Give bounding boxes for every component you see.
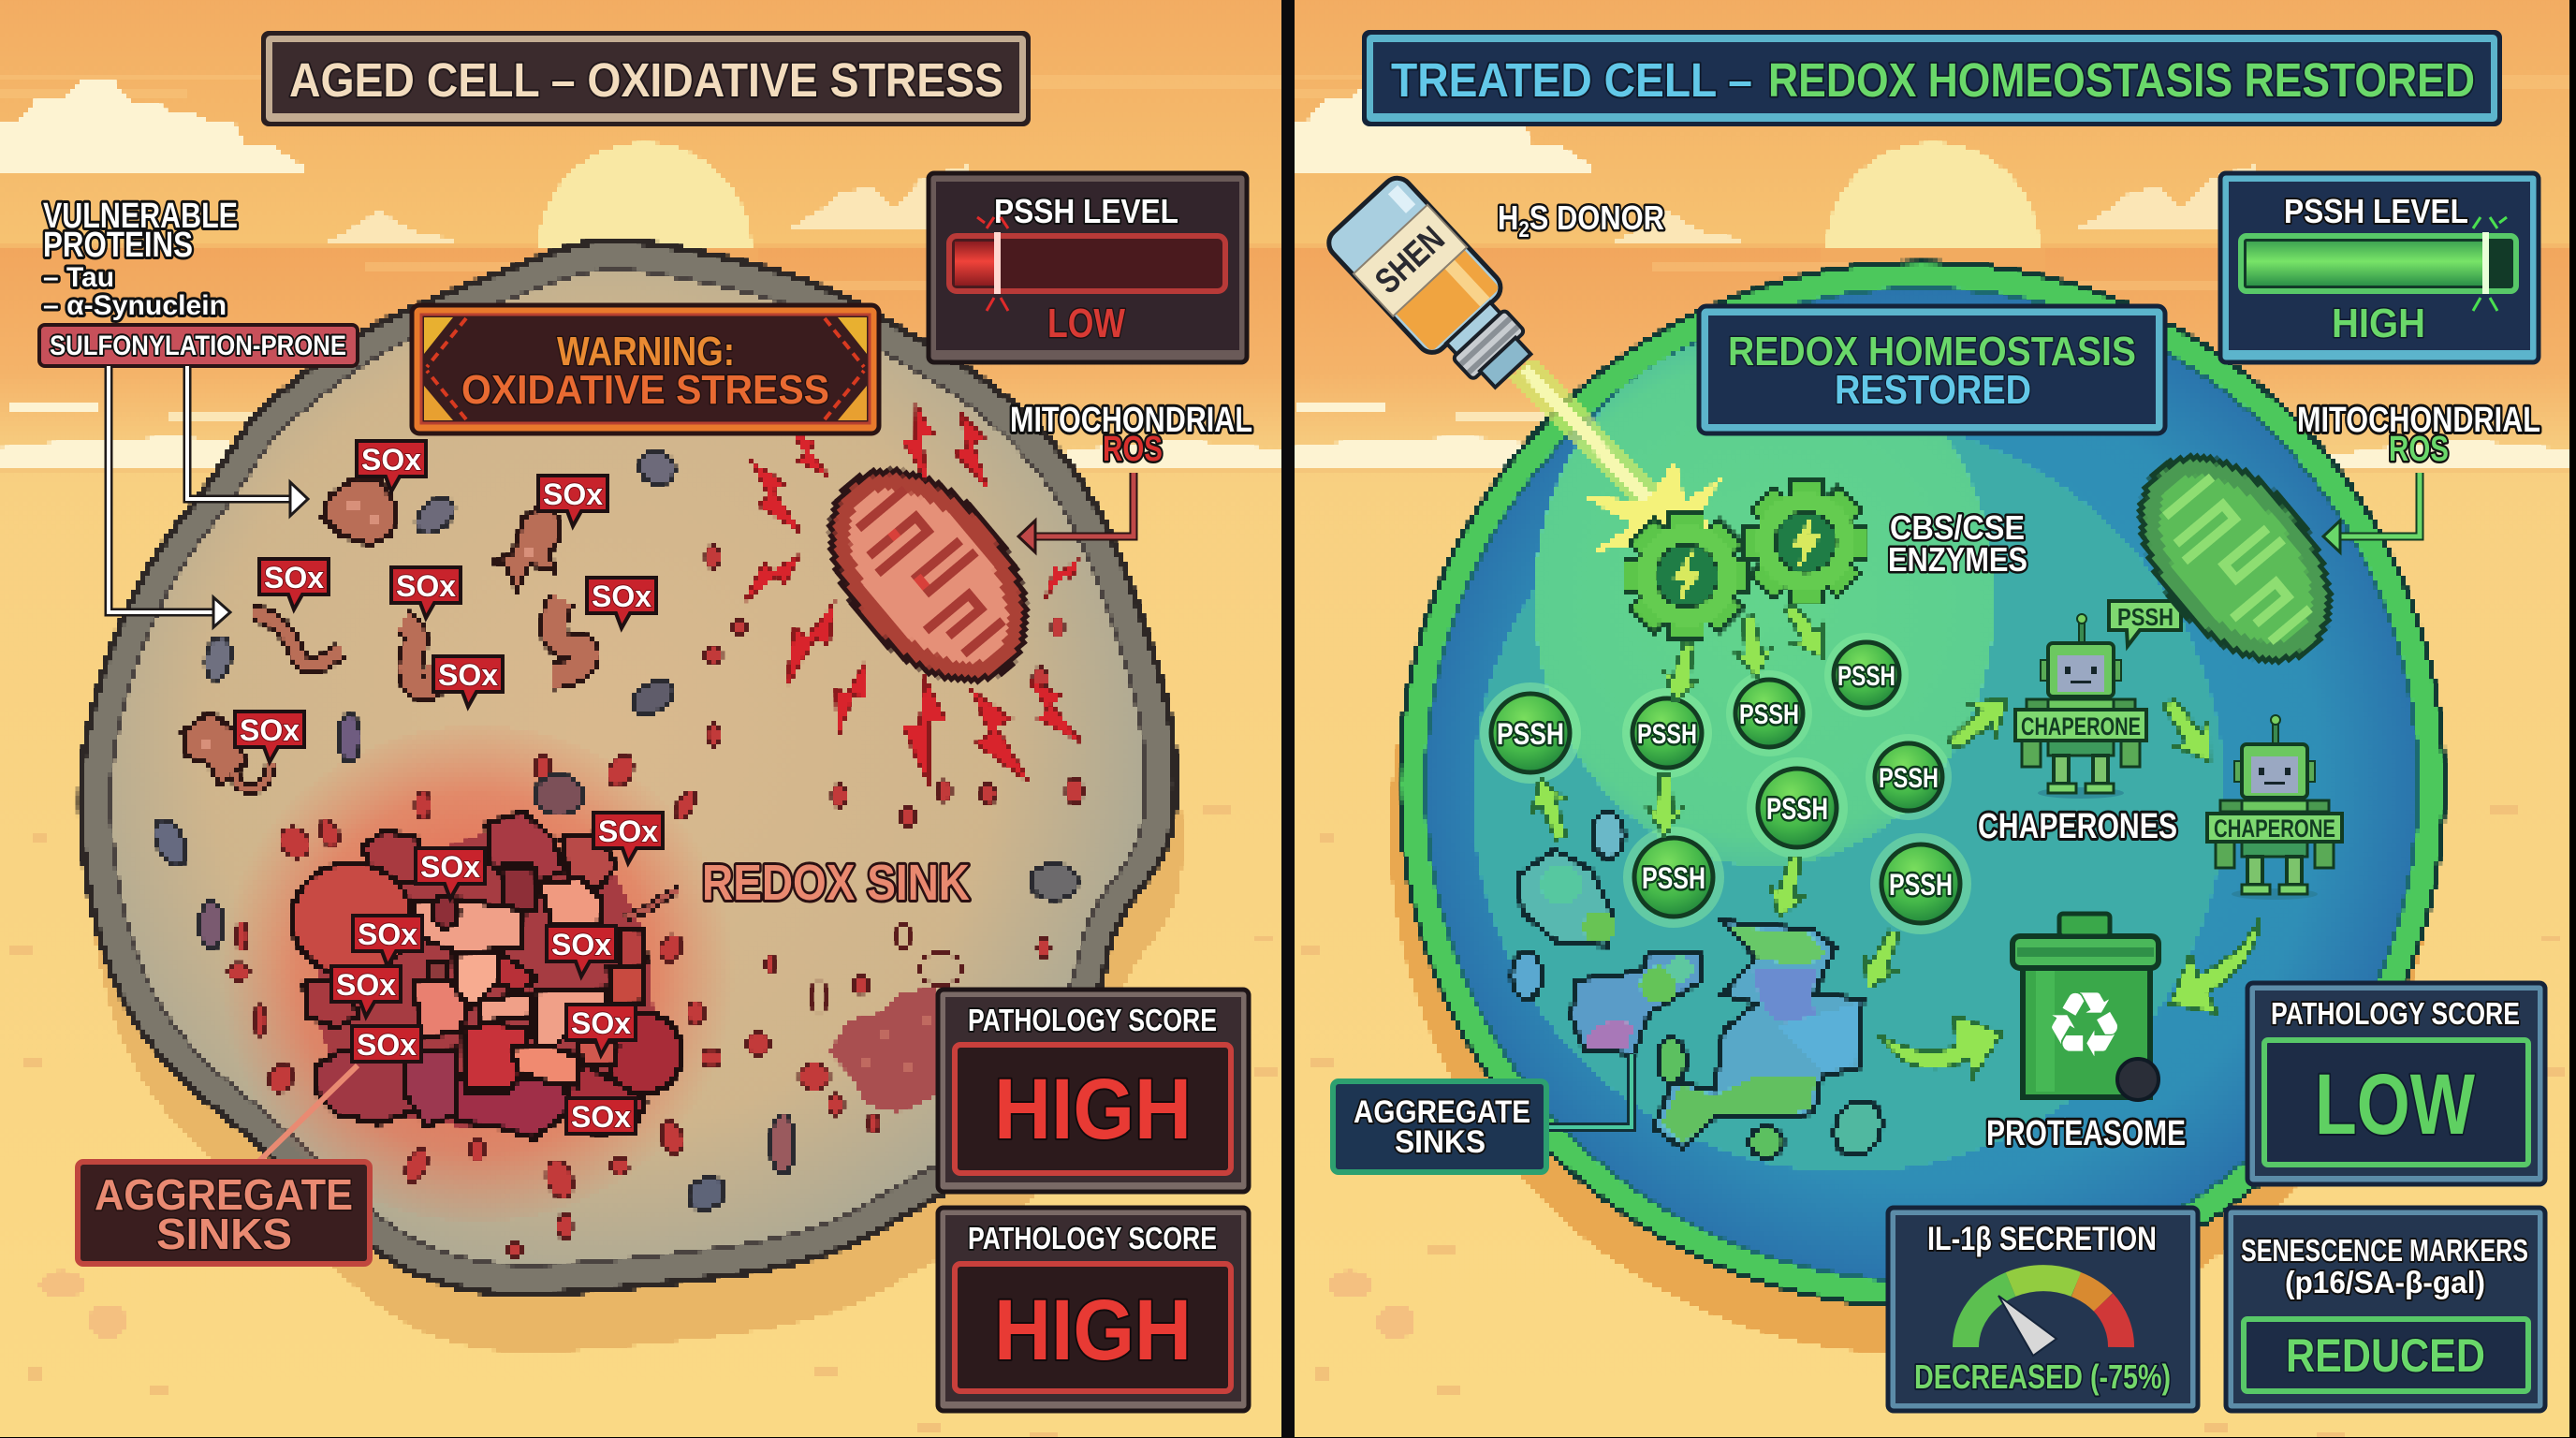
title: treated cell xyxy=(1362,30,2502,126)
panel: PSSH level high: PSSH LEVEL xyxy=(2284,192,2468,230)
PSSH sphere: PSSH xyxy=(1642,861,1705,895)
title: treated cell: REDOX HOMEOSTASIS RESTORED xyxy=(1768,53,2475,107)
panel: aggregate sinks right xyxy=(1333,1081,1546,1172)
gauge needle xyxy=(1998,1296,2056,1356)
SOx tag labels xyxy=(240,443,658,1134)
PSSH sphere xyxy=(1623,827,1724,928)
SOx tag labels: SOx xyxy=(438,658,498,692)
panel: senescence markers: REDUCED xyxy=(2286,1329,2485,1382)
aggregate blob one xyxy=(1518,850,1615,946)
SOx tag labels: SOx xyxy=(336,968,396,1002)
PSSH sphere xyxy=(1824,633,1909,717)
speech bubble PSSH: PSSH xyxy=(2117,603,2174,631)
arrow: ROS to healthy mitochondrion xyxy=(2323,473,2420,552)
label: vulnerable proteins: PROTEINS xyxy=(43,226,193,265)
panel: pathology score high one xyxy=(938,990,1249,1192)
PSSH sphere xyxy=(1866,734,1952,820)
panel: pathology score high one: HIGH xyxy=(994,1062,1192,1157)
SOx tag labels: SOx xyxy=(240,713,300,747)
panel: warning oxidative stress: WARNING: xyxy=(557,329,735,374)
panel: warning oxidative stress: OXIDATIVE STRESS xyxy=(461,367,829,413)
panel: redox homeostasis restored: RESTORED xyxy=(1835,367,2031,413)
SOx tag labels: SOx xyxy=(592,580,651,613)
panel: pathology score high two: PATHOLOGY SCORE xyxy=(968,1221,1217,1255)
beam and burst xyxy=(1509,358,1727,580)
small red fragments and organelle debris xyxy=(228,546,1083,1256)
aggregate sink cluster xyxy=(292,812,681,1138)
SOx tag labels: SOx xyxy=(420,850,480,884)
SOx tag labels: SOx xyxy=(361,443,421,477)
SOx tag labels: SOx xyxy=(571,1006,631,1040)
panel: warning oxidative stress xyxy=(412,305,879,433)
SHEN bottle: SHEN xyxy=(1368,219,1453,301)
label: CBS/CSE enzymes: ENZYMES xyxy=(1888,540,2027,579)
flow arrows xyxy=(1523,595,2261,1077)
gauge xyxy=(1966,1278,2121,1347)
PSSH sphere xyxy=(1622,688,1712,778)
proteasome bin xyxy=(2012,914,2159,1100)
label: vulnerable proteins xyxy=(43,197,238,321)
panel: pathology score high two: HIGH xyxy=(994,1283,1192,1378)
SOx tag labels: SOx xyxy=(358,917,417,951)
panel: PSSH level low xyxy=(929,173,1247,362)
arrow: to proteins lower xyxy=(109,366,230,627)
protein blob xyxy=(323,477,398,545)
protein squiggle one xyxy=(253,613,342,666)
panel: IL-1 beta secretion xyxy=(1888,1208,2198,1411)
tag: sulfonylation-prone xyxy=(39,325,358,366)
PSSH sphere: PSSH xyxy=(1766,792,1828,826)
label: H2S donor: S DONOR xyxy=(1530,198,1664,237)
panel: aggregate sinks right: AGGREGATE xyxy=(1354,1094,1530,1130)
protein squiggle two xyxy=(402,623,435,689)
arrow: ROS to mitochondrion xyxy=(1018,473,1134,552)
title: treated cell: TREATED CELL – xyxy=(1391,53,1752,107)
aggregates clearing xyxy=(1512,813,1890,1163)
label: H2S donor: H xyxy=(1498,198,1522,237)
label: vulnerable proteins: – α-Synuclein xyxy=(43,290,227,321)
PSSH sphere xyxy=(1726,670,1812,756)
PSSH sphere: PSSH xyxy=(1837,661,1895,692)
panel: pathology score low: LOW xyxy=(2315,1057,2475,1152)
enzymes gears xyxy=(1624,480,1867,638)
chaperone robot lower xyxy=(2207,715,2342,900)
chaperone robot upper: CHAPERONE xyxy=(2021,712,2141,741)
label: mitochondrial ROS right xyxy=(2297,401,2540,469)
protein star xyxy=(494,501,562,590)
proteasome bin: ♻ xyxy=(2044,973,2125,1078)
protein tail blob xyxy=(183,712,271,789)
panel: pathology score low: PATHOLOGY SCORE xyxy=(2271,996,2520,1031)
panel: PSSH level high: HIGH xyxy=(2332,301,2425,346)
protein texture xyxy=(201,501,535,749)
aggregate blob three xyxy=(1653,921,1863,1148)
panel: IL-1 beta secretion: DECREASED (-75%) xyxy=(1914,1357,2171,1396)
panel: pathology score high two xyxy=(938,1208,1249,1411)
label: redox sink: REDOX SINK xyxy=(702,855,970,911)
PSSH sphere xyxy=(1480,682,1581,784)
label: chaperones: CHAPERONES xyxy=(1978,807,2177,846)
panel: PSSH level low: PSSH LEVEL xyxy=(994,192,1178,230)
panel: IL-1 beta secretion: IL-1β SECRETION xyxy=(1927,1221,2157,1257)
panel: senescence markers xyxy=(2226,1208,2545,1411)
PSSH sphere: PSSH xyxy=(1497,717,1564,751)
label: vulnerable proteins: – Tau xyxy=(43,262,114,293)
divider between panels xyxy=(1281,0,1295,1438)
panel: aggregate sinks left: SINKS xyxy=(156,1210,292,1258)
panel: aggregate sinks right: SINKS xyxy=(1395,1124,1486,1160)
panel: aggregate sinks left xyxy=(78,1162,370,1264)
PSSH sphere: PSSH xyxy=(1879,763,1939,794)
label: mitochondrial ROS right: ROS xyxy=(2389,430,2449,469)
SOx tags xyxy=(235,441,663,1134)
small aggregate fragments xyxy=(1512,813,1890,1163)
mitochondrion damaged xyxy=(793,434,1064,717)
panel: PSSH level low: LOW xyxy=(1047,301,1125,346)
panel: aged cell background xyxy=(0,0,1281,1438)
vulnerable proteins xyxy=(183,477,587,789)
arrow line: aggregate sinks label xyxy=(1546,1054,1632,1127)
chaperone robot upper xyxy=(2015,614,2146,799)
tag: sulfonylation-prone: SULFONYLATION-PRONE xyxy=(50,330,346,361)
PSSH spheres xyxy=(1480,633,1971,934)
panel: PSSH level high xyxy=(2220,173,2539,362)
label: CBS/CSE enzymes: CBS/CSE xyxy=(1890,508,2025,547)
debris splatter xyxy=(829,985,938,1112)
treated cell xyxy=(1390,262,2444,1354)
title: aged cell: AGED CELL – OXIDATIVE STRESS xyxy=(289,53,1003,107)
chaperone robot lower: CHAPERONE xyxy=(2214,814,2335,843)
panel: senescence markers: (p16/SA-β-gal) xyxy=(2285,1265,2485,1299)
title: aged cell xyxy=(261,31,1031,126)
SOx tag labels: SOx xyxy=(598,814,658,848)
label: CBS/CSE enzymes xyxy=(1888,508,2027,579)
label: vulnerable proteins: VULNERABLE xyxy=(43,197,238,236)
SOx tag labels: SOx xyxy=(551,928,611,961)
label: mitochondrial ROS left: ROS xyxy=(1103,430,1163,469)
PSSH sphere xyxy=(1747,757,1848,858)
aggregate blob two xyxy=(1572,953,1703,1054)
SOx tag labels: SOx xyxy=(264,561,324,594)
PSSH sphere xyxy=(1870,833,1971,934)
label: H2S donor: 2 xyxy=(1518,217,1530,242)
SOx tag labels: SOx xyxy=(396,569,456,603)
leader line: aggregate sinks xyxy=(258,1065,358,1162)
speech bubble PSSH xyxy=(2109,601,2181,646)
panel: pathology score high one: PATHOLOGY SCORE xyxy=(968,1003,1217,1037)
label: mitochondrial ROS left: MITOCHONDRIAL xyxy=(1010,401,1252,440)
panel: pathology score low xyxy=(2247,983,2545,1184)
label: mitochondrial ROS left xyxy=(1010,401,1252,469)
ROS lightning bolts xyxy=(733,404,1088,792)
arrow: to proteins upper xyxy=(187,366,308,516)
SOx tag labels: SOx xyxy=(357,1028,417,1062)
SOx tag labels: SOx xyxy=(543,477,603,511)
label: proteasome: PROTEASOME xyxy=(1986,1114,2186,1153)
panel: redox homeostasis restored: REDOX HOMEOSTASIS xyxy=(1728,329,2136,374)
mitochondrion healthy xyxy=(2105,423,2365,695)
SHEN bottle xyxy=(1323,172,1551,406)
grey organelle fragments xyxy=(148,447,1077,1216)
PSSH sphere: PSSH xyxy=(1889,868,1953,902)
PSSH sphere: PSSH xyxy=(1637,719,1697,750)
panel: redox homeostasis restored xyxy=(1699,306,2165,433)
panel: aggregate sinks left: AGGREGATE xyxy=(95,1170,353,1219)
SOx tag labels: SOx xyxy=(571,1100,631,1134)
panel: treated cell background xyxy=(1288,0,2569,1438)
protein curve xyxy=(552,599,587,676)
aged cell xyxy=(80,241,1183,1352)
PSSH sphere: PSSH xyxy=(1739,699,1799,730)
